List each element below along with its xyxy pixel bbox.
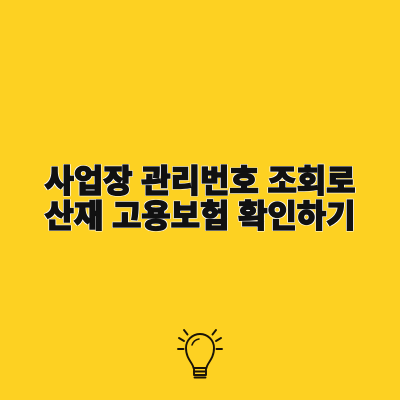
icon: light bulb xyxy=(177,329,223,378)
title: 사업장 관리번호 조회로 xyxy=(44,163,355,199)
title xyxy=(44,163,356,234)
title: 산재 고용보험 확인하기 xyxy=(44,198,355,234)
